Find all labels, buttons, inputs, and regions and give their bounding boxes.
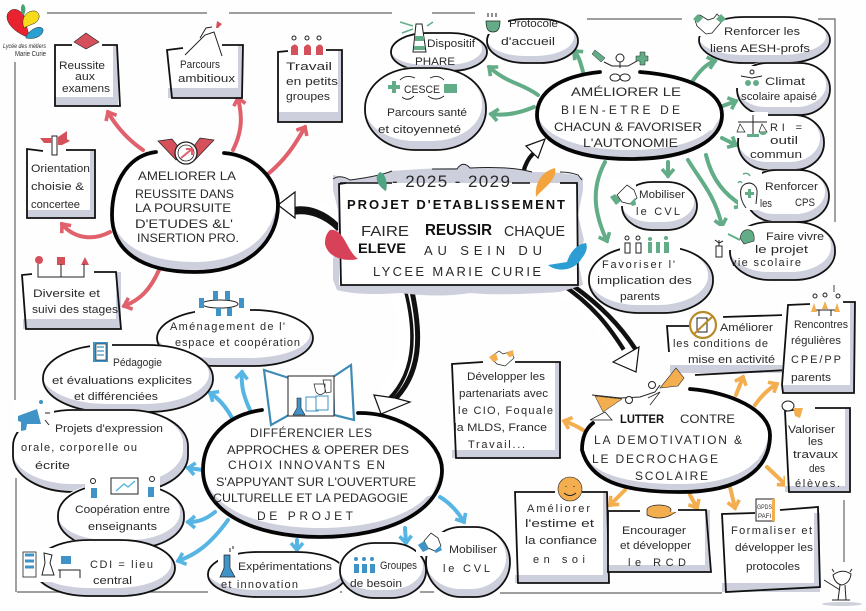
panel: mobiliser le cvl haut <box>608 180 697 230</box>
text: projets: orale, corporelle ou <box>21 442 137 454</box>
text: valoriser: élèves. <box>795 478 840 490</box>
text: estime: l'estime et <box>525 518 594 530</box>
text: groupes: Groupes <box>380 560 417 572</box>
text: formaliser <box>731 525 814 573</box>
icon: handshake <box>693 14 726 34</box>
panel: parcours ambitieux <box>167 21 243 98</box>
icon: meeting <box>811 293 840 316</box>
text: encourager: le RCD <box>628 557 686 569</box>
text: phare: PHARE <box>415 56 455 68</box>
text: cooperation <box>75 504 170 533</box>
text: reussite <box>59 60 111 95</box>
panel: climat scolaire apaise <box>735 62 830 115</box>
panel: travail en petits groupes <box>278 36 342 122</box>
text: valoriser: les <box>808 436 824 448</box>
text: groupes <box>350 560 417 590</box>
text: title: FAIRE <box>361 223 409 240</box>
icon: library desk and reader <box>23 552 80 578</box>
panel: rencontres regulieres <box>782 293 855 393</box>
panel: groupes de besoin <box>339 542 426 598</box>
icon: calm figures <box>741 70 762 86</box>
panel: renforcer les cps <box>738 169 829 222</box>
text: protocole <box>501 18 558 48</box>
text: cesce: Parcours santé <box>387 107 467 119</box>
text: heading reussite: REUSSITE DANS <box>135 187 234 201</box>
text: heading lutter <box>592 412 742 483</box>
text: experimentations: et innovation <box>221 579 298 591</box>
text: projets <box>21 423 163 472</box>
icon: mountain and flag <box>185 21 222 56</box>
text: estime: la confiance <box>525 535 597 547</box>
text: reussite: Reussite <box>59 60 105 72</box>
text: faire vivre: vie scolaire <box>731 257 801 269</box>
icon: team around table <box>199 291 244 316</box>
icon: head with clover <box>738 173 757 208</box>
text: heading bien-etre: L'AUTONOMIE <box>583 136 678 150</box>
text: travail <box>286 61 339 103</box>
text: orientation: Orientation <box>31 163 90 175</box>
text: heading lutter: LA DEMOTIVATION & <box>594 433 742 447</box>
text: faire vivre: le projet <box>755 244 808 256</box>
text: ameliorer conditions <box>673 322 775 366</box>
text: heading lutter: LUTTER <box>620 412 664 426</box>
icon: three pupils <box>354 557 375 573</box>
panel: formaliser les protocoles <box>722 499 820 592</box>
text: mobiliser bas: Mobiliser <box>449 544 497 556</box>
text: title: PROJET D'ETABLISSEMENT <box>347 197 565 212</box>
text: heading lutter: CONTRE <box>680 412 735 426</box>
text: developper: Développer les <box>467 371 546 383</box>
icon: gpds pafi booklet <box>756 499 775 521</box>
text: renforcer <box>710 26 811 55</box>
panel: cesce <box>364 67 486 150</box>
panel: cdi lieu central <box>20 539 175 596</box>
text: cesce <box>378 84 467 136</box>
text: cdi: central <box>93 575 132 587</box>
panel: reussite aux examens <box>55 33 120 106</box>
text: rencontres: Rencontres <box>794 319 848 331</box>
text: protocole: Protocole <box>509 18 558 30</box>
panel: favoriser l'implication <box>588 236 713 313</box>
text: groupes: de besoin <box>350 578 402 590</box>
icon: blue drop <box>548 243 587 270</box>
text: renforcer cps: CPS <box>795 197 815 209</box>
icon: no phone <box>690 312 716 338</box>
text: orientation: concertee <box>31 199 80 211</box>
text: climat: scolaire apaisé <box>741 91 817 103</box>
logo: Lycée des métiers <box>3 43 47 50</box>
text: encourager <box>620 525 691 569</box>
text: title <box>347 172 565 279</box>
text: heading reussite: LA POURSUITE <box>135 201 231 215</box>
text: diversite <box>32 288 119 316</box>
text: pedagogie: et différenciées <box>74 391 159 403</box>
panel: orientation choisie <box>27 131 95 218</box>
text: pedagogie <box>52 357 193 403</box>
text: ri: outil <box>770 135 798 147</box>
icon: red drop <box>325 230 358 260</box>
panel: faire vivre le projet <box>712 221 835 280</box>
text: developper: la MLDS, France <box>454 422 547 434</box>
text: valoriser <box>788 424 840 490</box>
icon: three shapes <box>35 256 89 277</box>
text: formaliser: protocoles <box>746 561 801 573</box>
text: travail: groupes <box>286 91 331 103</box>
text: cdi <box>90 559 153 587</box>
text: estime: en soi <box>533 554 585 566</box>
text: amenagement: espace et coopération <box>175 337 300 349</box>
icon: cup <box>486 13 500 32</box>
text: heading lutter: LE DECROCHAGE <box>592 452 718 466</box>
text: heading differencier: DIFFÉRENCIER LES <box>250 425 372 440</box>
text: climat: Climat <box>765 76 805 88</box>
text: experimentations <box>221 561 333 591</box>
big arrow: to bien-etre branch <box>517 139 545 183</box>
text: valoriser: des <box>809 463 825 475</box>
panel: developper les partenariats <box>452 350 560 458</box>
icon: gpds pafi booklet: PAFI <box>758 514 771 520</box>
icon: medal <box>782 401 803 418</box>
text: faire vivre <box>731 231 824 269</box>
text: mobiliser bas: le CVL <box>443 563 490 575</box>
text: title: REUSSIR <box>425 222 492 239</box>
panel: cooperation entre enseignants <box>57 474 184 548</box>
icon: three people <box>291 36 323 55</box>
text: heading differencier: S'APPUYANT SUR L'OUVERTURE <box>216 475 416 489</box>
panel: projets d'expression <box>12 400 188 492</box>
icon: joined hands <box>610 185 637 206</box>
icon: cat illustrator signature <box>822 569 862 606</box>
panel: encourager rcd <box>608 505 711 572</box>
panel: experimentations et innovation <box>207 544 346 597</box>
text: encourager: et développer <box>620 540 691 552</box>
icon: balance person and infinity <box>592 50 648 81</box>
icon: joined hands <box>418 533 442 553</box>
text: developper: le CIO, Foquale <box>458 405 553 417</box>
text: heading reussite: D'ETUDES &L' <box>135 217 233 231</box>
icon: winged target <box>158 138 214 164</box>
text: renforcer: liens AESH-profs <box>710 43 811 55</box>
text: mobiliser bas <box>443 544 497 575</box>
text: ameliorer conditions: Améliorer <box>720 322 773 334</box>
text: heading bien-etre: BIEN-ETRE DE <box>561 103 680 117</box>
icon: climber reaching book <box>590 368 684 420</box>
text: orientation <box>31 163 90 211</box>
text: renforcer: Renforcer les <box>724 26 801 38</box>
text: reussite: examens <box>62 83 111 95</box>
panel: central title <box>325 164 587 296</box>
logo <box>3 4 47 58</box>
text: renforcer cps: Renforcer <box>765 181 818 193</box>
panel: ameliorer les conditions <box>667 312 787 375</box>
text: travail: en petits <box>286 76 339 88</box>
text: amenagement: Aménagement de l' <box>170 321 285 333</box>
icon: green drop <box>377 172 387 191</box>
text: cooperation: Coopération entre <box>75 504 170 516</box>
text: rencontres: CPE/PP <box>791 354 841 366</box>
text: pedagogie: Pédagogie <box>113 357 162 369</box>
text: diversite: suivi des stages <box>32 304 119 316</box>
big arrow: to lutter branch <box>556 285 639 372</box>
text: favoriser: parents <box>620 291 661 303</box>
text: diversite: Diversite et <box>33 288 100 300</box>
text: developper: partenariats avec <box>459 388 549 400</box>
text: phare: Dispositif <box>427 38 476 50</box>
text: formaliser: développer les <box>735 542 814 554</box>
arrows: blue <box>178 372 464 561</box>
text: heading differencier: APPROCHES & OPERER DES <box>227 443 409 457</box>
icon: lighthouse <box>400 22 433 52</box>
icon: gpds pafi booklet: GPDS <box>757 505 772 511</box>
text: formaliser: Formaliser et <box>731 525 812 537</box>
text: amenagement <box>170 321 300 349</box>
text: climat <box>741 76 817 103</box>
text: favoriser: implication des <box>597 275 693 287</box>
text: heading lutter: SCOLAIRE <box>635 469 708 483</box>
text: pedagogie: et évaluations explicites <box>52 375 193 387</box>
text: title: CHAQUE <box>504 223 565 240</box>
text: heading reussite <box>135 169 239 245</box>
icon: scales <box>737 115 767 137</box>
big arrow: to differencier branch <box>374 285 418 414</box>
text: orientation: choisie & <box>31 181 85 193</box>
text: ri: commun <box>750 149 802 161</box>
text: heading differencier: CHOIX INNOVANTS EN <box>228 458 385 472</box>
arrows: red <box>62 98 305 306</box>
panel: ameliorer l'estime <box>515 477 609 583</box>
panel: main branch differencier <box>203 365 442 537</box>
panel: renforcer les liens <box>690 12 830 63</box>
text: cesce: CESCE <box>404 84 440 96</box>
text: heading bien-etre <box>554 84 702 150</box>
icon: open window with masks and flask <box>264 365 354 425</box>
panel: dispositif phare <box>390 22 487 71</box>
panel: amenagement de l'espace <box>156 291 313 366</box>
icon: orange drop <box>536 168 555 197</box>
panel: ri outil commun <box>735 112 824 170</box>
text: renforcer cps <box>760 181 818 210</box>
text: reussite: aux <box>75 71 96 83</box>
text: ri <box>750 122 802 161</box>
big arrow: to reussite branch <box>278 192 342 226</box>
icon: flask <box>220 546 235 577</box>
text: heading reussite: INSERTION PRO. <box>137 231 239 245</box>
text: ri: RI = <box>770 122 802 134</box>
text: rencontres <box>791 319 848 384</box>
text: cdi: CDI = lieu <box>90 559 153 571</box>
panel: main branch ameliorer la reussite <box>112 138 278 272</box>
text: developper: Travail... <box>468 439 525 451</box>
text: parcours: Parcours <box>180 59 220 71</box>
panel: diversite et suivi des stages <box>22 256 121 329</box>
text: cesce: et citoyenneté <box>378 124 461 136</box>
text: heading differencier <box>213 425 416 523</box>
text: renforcer cps: les <box>760 198 772 210</box>
text: heading differencier: DE PROJET <box>257 509 354 523</box>
text: heading reussite: AMELIORER LA <box>138 169 236 183</box>
panel: valoriser les travaux <box>782 401 850 492</box>
text: title: - 2025 - 2029 <box>392 172 510 191</box>
panel: protocole d'accueil <box>480 10 578 63</box>
text: faire vivre: Faire vivre <box>766 231 824 243</box>
text: title: ELEVE <box>358 240 406 256</box>
icon: parents and students <box>625 236 669 253</box>
icon: tape measure <box>647 505 676 518</box>
icon: megaphone <box>18 400 50 431</box>
icon: graduation cap <box>74 33 99 49</box>
text: travail: Travail <box>286 61 332 73</box>
icon: handshake <box>489 350 514 366</box>
icon: cross and school <box>388 76 457 99</box>
text: parcours <box>178 59 236 85</box>
text: estime <box>525 503 597 566</box>
logo: Marie Curie <box>15 51 46 58</box>
text: developper <box>454 371 553 451</box>
icon: smiley <box>558 477 582 501</box>
text: parcours: ambitioux <box>178 73 236 85</box>
icon: checklist <box>93 342 108 362</box>
text: mobiliser: Mobiliser <box>639 189 685 201</box>
text: valoriser: travaux <box>793 449 839 461</box>
panel: main branch bien-etre <box>537 50 722 159</box>
panel: mobiliser le cvl bas <box>416 526 510 597</box>
text: favoriser: Favoriser l' <box>602 259 675 271</box>
text: valoriser: Valoriser <box>788 424 835 436</box>
text: cooperation: enseignants <box>88 521 158 533</box>
text: heading bien-etre: AMÉLIORER LE <box>571 84 681 99</box>
text: mobiliser <box>636 189 685 218</box>
text: heading differencier: CULTURELLE ET LA PEDAGOGIE <box>213 491 408 505</box>
text: protocole: d'accueil <box>501 36 555 48</box>
panel: pedagogie et evaluations <box>42 340 213 412</box>
panel: main branch lutter <box>582 368 770 492</box>
text: title: AU SEIN DU <box>424 243 542 258</box>
text: heading bien-etre: CHACUN & FAVORISER <box>554 120 702 134</box>
text: phare <box>415 38 476 68</box>
text: title: LYCEE MARIE CURIE <box>373 264 541 279</box>
text: favoriser <box>597 259 693 303</box>
text: rencontres: régulières <box>791 335 842 347</box>
arrows: green <box>489 51 743 241</box>
arrows: orange <box>564 377 786 508</box>
icon: signpost <box>40 131 70 155</box>
icon: teachers and chart <box>90 476 154 498</box>
text: rencontres: parents <box>791 372 832 384</box>
text: estime: Améliorer <box>527 503 590 515</box>
text: encourager: Encourager <box>622 525 686 537</box>
text: experimentations: Expérimentations <box>238 561 333 573</box>
text: projets: écrite <box>35 460 70 472</box>
text: projets: Projets d'expression <box>55 423 163 435</box>
icon: watering can and plant <box>715 230 754 257</box>
text: ameliorer conditions: les conditions de <box>673 338 768 350</box>
text: ameliorer conditions: mise en activité <box>688 354 775 366</box>
text: mobiliser: le CVL <box>636 206 680 218</box>
